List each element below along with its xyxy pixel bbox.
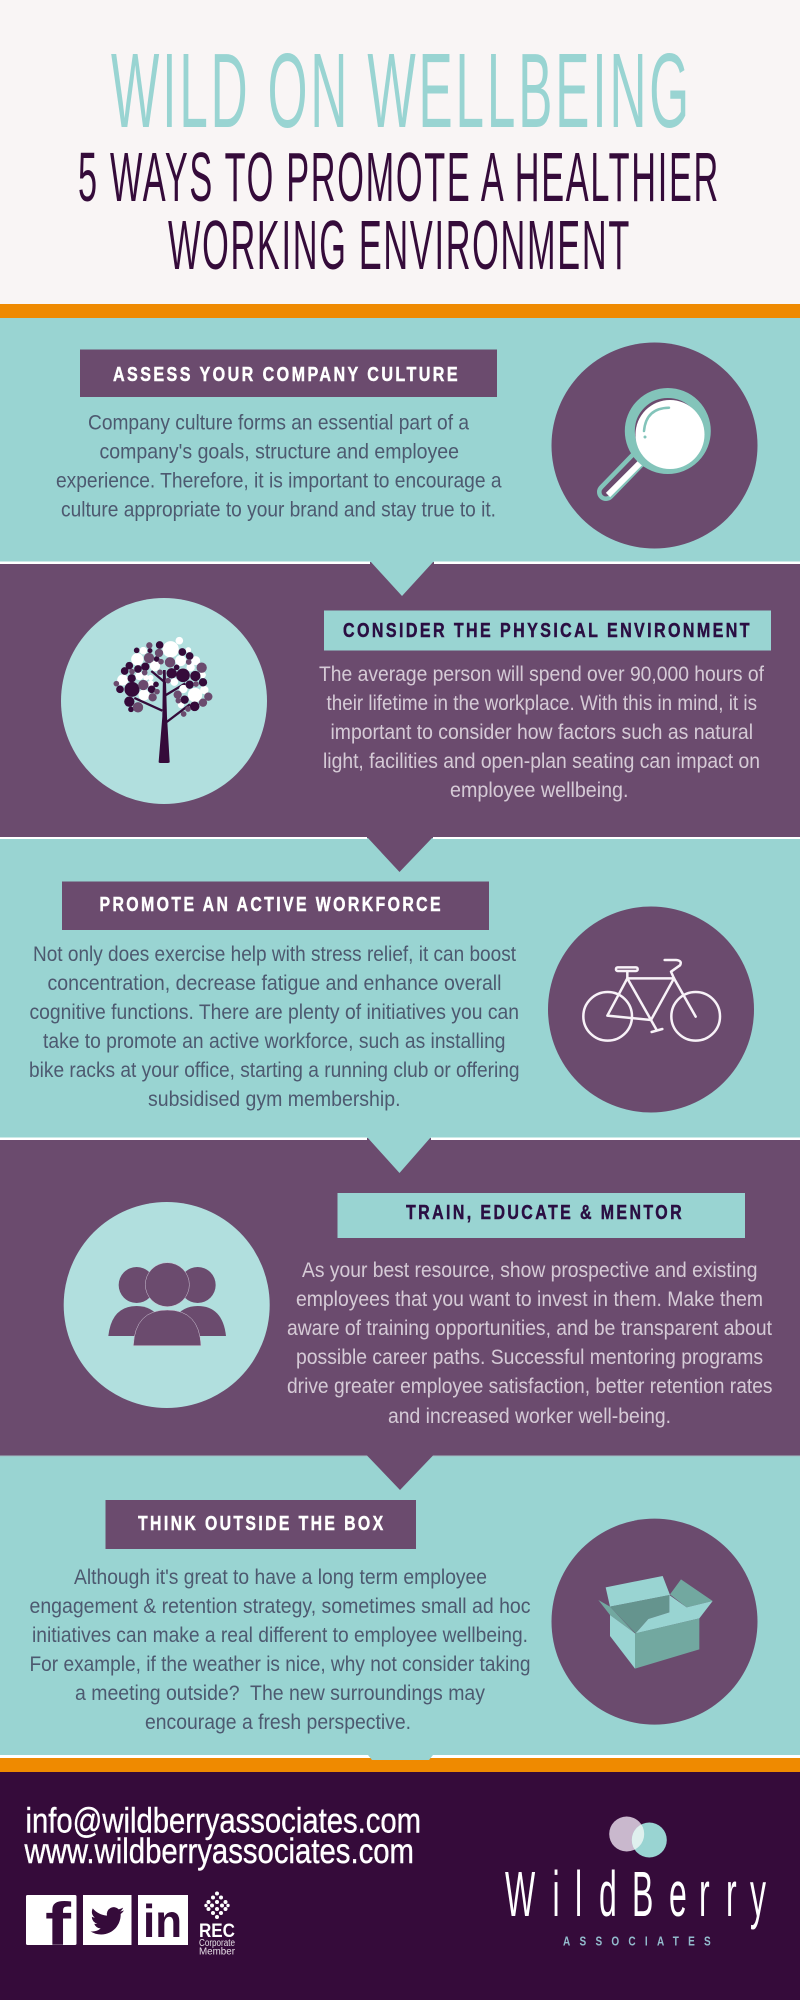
heading: ASSESS YOUR COMPANY CULTURE bbox=[113, 364, 460, 386]
panel: train, educate and mentor bbox=[0, 1137, 800, 1456]
arrow bbox=[370, 561, 434, 596]
icon: bicycle bbox=[548, 906, 754, 1112]
icon: people bbox=[64, 1202, 270, 1408]
panel: header bbox=[0, 0, 800, 318]
logo: WildBerry Associates bbox=[505, 1816, 766, 1949]
text block: cognitive functions. There are plenty of initiatives you can bbox=[30, 1001, 519, 1024]
heading bbox=[338, 1193, 745, 1238]
subtitle bbox=[78, 138, 720, 284]
text block: For example, if the weather is nice, why not consider taking bbox=[30, 1653, 530, 1676]
heading: THINK OUTSIDE THE BOX bbox=[138, 1513, 386, 1535]
text block: bike racks at your office, starting a running club or offering bbox=[29, 1059, 520, 1082]
icon: facebook bbox=[26, 1891, 76, 1958]
text block bbox=[56, 412, 502, 522]
logo: WildBerry Associates: WildBerry bbox=[505, 1858, 766, 1930]
logo: WildBerry Associates: ASSOCIATES bbox=[563, 1934, 720, 1949]
panel: consider the physical environment bbox=[0, 561, 800, 838]
text block bbox=[30, 1566, 530, 1734]
contact details bbox=[24, 1800, 421, 1871]
text block: encourage a fresh perspective. bbox=[145, 1711, 411, 1734]
text block: take to promote an active workforce, such as installing bbox=[43, 1030, 506, 1053]
arrow bbox=[367, 1456, 433, 1490]
text block: concentration, decrease fatigue and enhance overall bbox=[48, 972, 502, 995]
icon: magnifying glass bbox=[552, 342, 758, 548]
panel: promote an active workforce bbox=[0, 837, 800, 1139]
text block: a meeting outside? The new surroundings may bbox=[75, 1682, 485, 1705]
panel: footer bbox=[0, 1755, 800, 2000]
icon: open box bbox=[552, 1519, 758, 1725]
text block: company's goals, structure and employee bbox=[100, 440, 459, 464]
heading bbox=[80, 350, 497, 397]
heading: PROMOTE AN ACTIVE WORKFORCE bbox=[100, 894, 443, 916]
contact details: info@wildberryassociates.com bbox=[26, 1800, 421, 1840]
text block: experience. Therefore, it is important to encourage a bbox=[56, 470, 502, 492]
icon: REC corporate member badge: REC bbox=[199, 1921, 235, 1942]
text block bbox=[29, 943, 520, 1111]
text block: employees that you want to invest in them. Make them bbox=[296, 1288, 763, 1311]
icon: tree bbox=[61, 598, 267, 804]
heading bbox=[62, 882, 489, 930]
heading bbox=[324, 610, 771, 650]
text block: subsidised gym membership. bbox=[148, 1088, 400, 1111]
heading: TRAIN, EDUCATE & MENTOR bbox=[406, 1202, 684, 1224]
text block: their lifetime in the workplace. With this in mind, it is bbox=[326, 692, 757, 715]
text block: culture appropriate to your brand and stay true to it. bbox=[61, 498, 496, 522]
icon: twitter bbox=[83, 1895, 132, 1945]
icon: linkedin: in bbox=[143, 1895, 182, 1947]
icon: facebook: f bbox=[45, 1891, 72, 1958]
panel: assess your company culture bbox=[0, 318, 800, 562]
text block: employee wellbeing. bbox=[450, 779, 628, 802]
arrow bbox=[367, 837, 433, 872]
arrow bbox=[367, 1137, 431, 1173]
text block: light, facilities and open-plan seating can impact on bbox=[323, 750, 760, 773]
text block: Company culture forms an essential part of a bbox=[88, 412, 469, 434]
icon: REC corporate member badge: Corporate bbox=[199, 1938, 235, 1949]
text block bbox=[287, 1259, 772, 1428]
text block bbox=[319, 663, 764, 802]
text block: Although it's great to have a long term employee bbox=[74, 1566, 487, 1589]
text block: The average person will spend over 90,000 hours of bbox=[319, 663, 764, 686]
text block: possible career paths. Successful mentoring programs bbox=[296, 1346, 763, 1369]
text block: and increased worker well-being. bbox=[388, 1405, 671, 1428]
text block: engagement & retention strategy, sometimes small ad hoc bbox=[30, 1595, 530, 1618]
heading bbox=[106, 1500, 416, 1549]
icon: REC corporate member badge: Member bbox=[199, 1946, 236, 1958]
text block: initiatives can make a real different to employee wellbeing. bbox=[32, 1624, 528, 1647]
text block: As your best resource, show prospective and existing bbox=[302, 1259, 758, 1282]
contact details: www.wildberryassociates.com bbox=[24, 1831, 414, 1871]
text block: aware of training opportunities, and be transparent about bbox=[287, 1317, 772, 1340]
text block: important to consider how factors such as natural bbox=[330, 721, 753, 744]
icon: REC corporate member badge bbox=[199, 1892, 236, 1958]
text block: Not only does exercise help with stress relief, it can boost bbox=[33, 943, 516, 966]
panel: think outside the box bbox=[0, 1456, 800, 1756]
